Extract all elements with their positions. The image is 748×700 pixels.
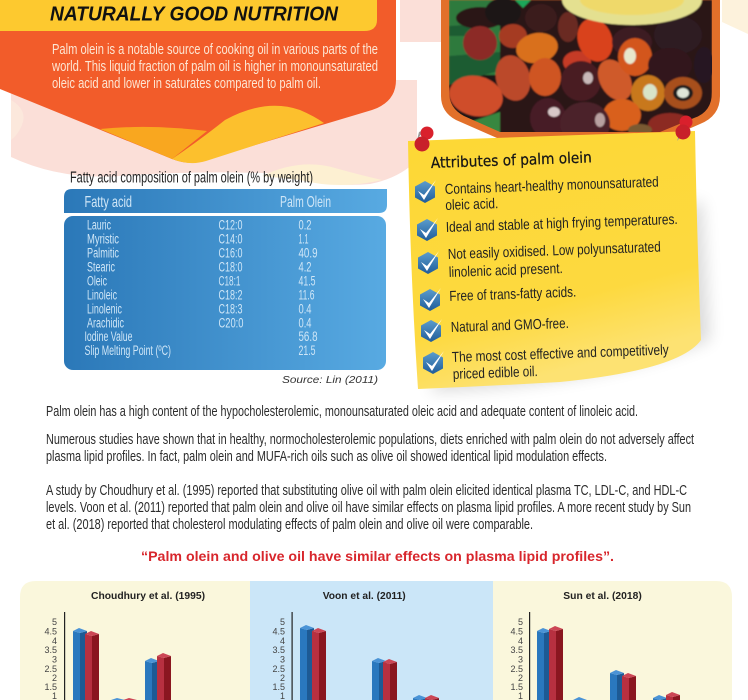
table body: C16:0 <box>218 246 242 260</box>
photo: palm fruits and oil <box>441 0 720 146</box>
bar chart: Voon et al. (2011): Voon et al. (2011) <box>323 590 406 602</box>
bar chart: Sun et al. (2018): 4 <box>518 636 523 646</box>
table body: C18:0 <box>218 260 242 274</box>
table body: Iodine Value <box>84 329 132 344</box>
intro text: world. This liquid fraction of palm oil is higher in monounsaturated <box>51 58 378 75</box>
attribute list: priced edible oil. <box>453 364 538 383</box>
bar chart: Voon et al. (2011) <box>272 590 439 700</box>
bar chart: Sun et al. (2018): 5 <box>518 617 523 627</box>
table body: C12:0 <box>218 218 242 232</box>
bar chart: Choudhury et al. (1995): 5 <box>52 617 57 627</box>
bar chart: Sun et al. (2018): 2.5 <box>510 664 523 674</box>
table body: 41.5 <box>298 274 316 288</box>
table title: Fatty acid composition of palm olein (% by weight) <box>70 170 313 186</box>
attribute list: Contains heart-healthy monounsaturated <box>445 175 659 198</box>
accent swoops <box>100 106 324 163</box>
intro text: Palm olein is a notable source of cooking oil in various parts of the <box>52 41 378 58</box>
table body: C18:3 <box>218 302 242 316</box>
table body: 0.4 <box>298 302 312 316</box>
heading banner <box>0 0 377 31</box>
bar chart: Voon et al. (2011): 2 <box>280 673 285 683</box>
attribute list: linolenic acid present. <box>449 261 563 281</box>
table body: 56.8 <box>298 329 318 344</box>
table header: Fatty acid <box>84 194 132 211</box>
callout quote: “Palm olein and olive oil have similar effects on plasma lipid profiles”. <box>141 548 614 564</box>
table body: C14:0 <box>218 232 242 246</box>
table body: Oleic <box>87 274 107 288</box>
bar chart: Choudhury et al. (1995): 4 <box>52 636 57 646</box>
table: fatty acid composition <box>64 189 387 370</box>
note shadow <box>430 200 710 392</box>
pin left <box>414 126 434 152</box>
table body: 40.9 <box>298 246 318 260</box>
intro text <box>51 41 378 92</box>
bar chart: Choudhury et al. (1995): 4.5 <box>44 626 57 636</box>
table body: 0.2 <box>298 218 312 232</box>
attribute list: The most cost effective and competitively <box>452 342 670 366</box>
attribute list: Natural and GMO-free. <box>451 316 569 336</box>
table body <box>64 216 386 370</box>
table body: Linoleic <box>87 288 117 302</box>
table body: Palmitic <box>87 246 119 260</box>
attribute list <box>445 175 678 383</box>
attribute list: Ideal and stable at high frying temperatures. <box>446 212 678 236</box>
table body: 1.1 <box>298 232 308 246</box>
heading banner: NATURALLY GOOD NUTRITION <box>50 4 339 26</box>
table body: Lauric <box>87 218 111 232</box>
table body: C20:0 <box>218 316 244 330</box>
table body: 11.6 <box>298 288 314 302</box>
attribute list: Not easily oxidised. Low polyunsaturated <box>448 240 661 263</box>
bar chart: Voon et al. (2011): 1.5 <box>272 682 285 692</box>
bar chart: Sun et al. (2018): 3.5 <box>510 645 523 655</box>
bar chart: Sun et al. (2018): 2 <box>518 673 523 683</box>
table body: Arachidic <box>87 316 124 330</box>
bar chart: Sun et al. (2018): 3 <box>518 654 523 664</box>
background shapes <box>11 0 748 185</box>
table header <box>64 189 387 213</box>
bar chart: Sun et al. (2018) <box>510 590 680 700</box>
bar chart: Choudhury et al. (1995) <box>44 590 205 700</box>
bar chart: Choudhury et al. (1995): 2 <box>52 673 57 683</box>
bar chart: Choudhury et al. (1995): 1.5 <box>44 682 57 692</box>
body text: et al. (2018) reported that cholesterol modulating effects of palm olein and olive oil were comparable. <box>46 516 533 533</box>
bar chart: Voon et al. (2011): 3.5 <box>272 645 285 655</box>
bar chart: Voon et al. (2011): 4.5 <box>272 626 285 636</box>
bar chart: Sun et al. (2018): 4.5 <box>510 626 523 636</box>
panel: intro <box>0 0 396 163</box>
table body: Slip Melting Point (ºC) <box>84 343 171 358</box>
pin right <box>676 116 692 141</box>
bar chart: Choudhury et al. (1995): 3.5 <box>44 645 57 655</box>
table body: Linolenic <box>87 302 122 316</box>
attribute list: Free of trans-fatty acids. <box>449 285 577 305</box>
intro text: oleic acid and lower in saturates compared to palm oil. <box>52 75 321 92</box>
body text <box>46 403 695 533</box>
check icons <box>415 180 444 374</box>
bar chart: Sun et al. (2018): Sun et al. (2018) <box>563 590 642 602</box>
bar chart: Voon et al. (2011): 3 <box>280 654 285 664</box>
table header: Palm Olein <box>280 194 331 211</box>
note heading: Attributes of palm olein <box>431 148 592 172</box>
attribute list: oleic acid. <box>445 196 499 214</box>
bar chart: Voon et al. (2011): 4 <box>280 636 285 646</box>
bar chart: Choudhury et al. (1995): Choudhury et al. (1995) <box>91 590 205 602</box>
bar chart: Choudhury et al. (1995): 3 <box>52 654 57 664</box>
table body: 21.5 <box>298 343 316 358</box>
table body: 0.4 <box>298 316 312 330</box>
bar chart: Sun et al. (2018): 1.5 <box>510 682 523 692</box>
table body: C18:2 <box>218 288 242 302</box>
bar chart: Choudhury et al. (1995): 2.5 <box>44 664 57 674</box>
bar chart: Voon et al. (2011): 5 <box>280 617 285 627</box>
table source: Source: Lin (2011) <box>282 374 378 386</box>
table body: C18:1 <box>218 274 240 288</box>
panel: charts background <box>20 581 732 700</box>
table body: Stearic <box>87 260 115 274</box>
note: attributes of palm olein <box>408 116 701 389</box>
table body: Myristic <box>87 232 119 246</box>
table body: 4.2 <box>298 260 312 274</box>
bar chart: Voon et al. (2011): 2.5 <box>272 664 285 674</box>
